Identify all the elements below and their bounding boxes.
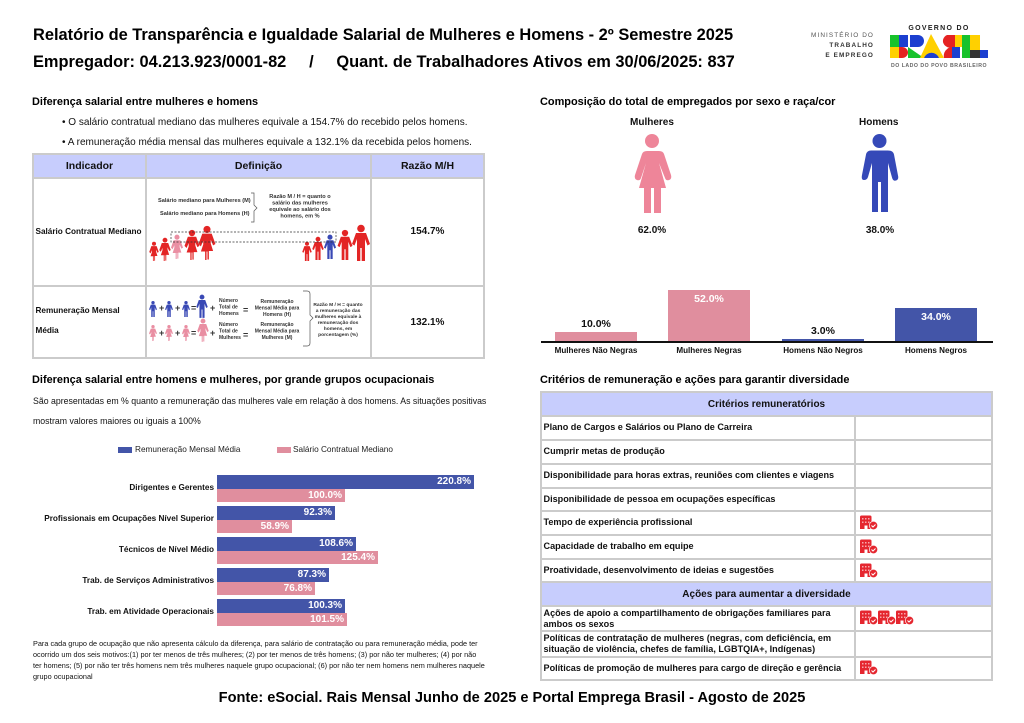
row: promoção: Políticas de promoção de mulheres para cargo de direção e gerência [544,663,841,673]
value: 101.5%: 101.5% [310,614,344,625]
value: 100.3%: 100.3% [308,600,342,611]
label: Homens Negros: Homens Negros [905,346,967,355]
header: indicator: Indicador [66,160,113,172]
diagram: average pay definition: Homens (H) [263,312,291,318]
diagram: median salary definition: Salário mediano para Homens (H) [160,211,250,217]
diagram: average pay definition: Total de [219,328,238,334]
diagram: average pay definition: Remuneração [260,299,294,305]
row: plano de cargos: Plano de Cargos e Salários ou Plano de Carreira [544,422,752,432]
bar: women non-black [555,332,637,342]
heading: occupational groups: Diferença salarial entre homens e mulheres, por grande grupos ocupacionais [32,374,434,386]
row: contratação: situação de violência, chefes de família, LGBTQIA+, Indígenas) [544,644,815,654]
bar: Operacionais median [217,613,347,626]
row: apoio: ambos os sexos [544,619,614,629]
header: definition: Definição [235,160,282,172]
diagram: average pay definition: = [243,305,248,315]
diagram: average pay definition: Mulheres [219,335,241,341]
value: 108.6%: 108.6% [319,538,353,549]
logo: ministry: E EMPREGO [825,52,874,59]
diagram: average pay definition: + [175,328,180,338]
legend: median salary [277,447,291,453]
text: footnote: ocorrido um dos seis motivos:(1) por ter menos de três mulheres; (2) por ter menos de três homens; (3) por não ter mulheres; (4) por não [33,650,476,659]
row: ocupações [540,487,857,512]
row: ocupações: Disponibilidade de pessoa em ocupações específicas [544,494,775,504]
cell: median salary label: Salário Contratual Mediano [36,227,142,236]
table: indicators [32,153,485,359]
text: explanation: São apresentadas em % quanto a remuneração das mulheres vale em relação à dos homens. As situações positivas [33,396,486,406]
row: promoção [540,656,857,681]
diagram: average pay definition: Mensal Média para [255,306,299,312]
bar: Profissionais median [217,520,292,533]
value: women share: 62.0% [638,225,666,236]
diagram: average pay definition: porcentagem (%) [318,332,358,338]
cell: average definition [145,285,372,359]
row: apoio: Ações de apoio a compartilhamento de obrigações familiares para [544,608,831,618]
icon: woman [634,134,672,213]
value: 3.0%: 3.0% [811,325,835,337]
row: horas extras: Disponibilidade para horas extras, reuniões com clientes e viagens [544,470,834,480]
diagram: average pay definition: a remuneração das [316,308,361,314]
bar: women black [668,290,750,342]
table: criteria [540,391,993,681]
cell: median value [370,177,485,287]
bar: Técnicos median [217,551,378,564]
bar: men black [895,308,977,342]
bar: Profissionais average [217,506,335,520]
diagram: average pay definition: = [191,303,196,313]
row: proatividade: Proatividade, desenvolvimento de ideias e sugestões [544,565,774,575]
text: footnote: grupo ocupacional [33,672,93,681]
bar: Serviços median [217,582,315,595]
text: footnote: ter homens; (5) por não ter três homens nem três mulheres naquele grupo ocupacional; (6) por não ter nem homens nem mulheres naquele [33,661,485,670]
cell: median value: 154.7% [411,226,444,237]
header: ratio [370,153,485,179]
value: 34.0%: 34.0% [921,311,951,323]
header: actions [540,581,993,607]
legend text: median salary: Salário Contratual Mediano [293,445,393,454]
header: ratio: Razão M/H [401,160,454,172]
cell: average value [370,285,485,359]
diagram: average pay definition: Total de [219,304,238,310]
bar chart: occupational groups [44,475,474,626]
value: men share: 38.0% [866,225,894,236]
bar: Serviços average [217,568,329,582]
label: Mulheres Negras: Mulheres Negras [676,346,742,355]
row: equipe [540,534,857,560]
value: 125.4%: 125.4% [341,552,375,563]
diagram: average pay definition: = [191,328,196,338]
label: Atividade Operacionais: Trab. em Atividade Operacionais [87,607,214,616]
text: footnote: Para cada grupo de ocupação que não apresenta cálculo da diferença, para salário de contratação ou para remuneração média, pode ter [33,639,478,648]
diagram: average pay definition: Mulheres (M) [262,335,293,341]
icon: man [862,134,898,212]
label: women: Mulheres [630,117,674,128]
logo: government of Brazil: GOVERNO DO [908,25,970,32]
heading: salary difference: Diferença salarial entre mulheres e homens [32,96,258,108]
value: 58.9%: 58.9% [261,521,289,532]
logo: ministry: MINISTÉRIO DO [811,32,874,39]
label: Dirigentes: Dirigentes e Gerentes [129,483,214,492]
heading: composition: Composição do total de empregados por sexo e raça/cor [540,96,835,108]
logo: government of Brazil [890,25,988,69]
value: 87.3%: 87.3% [298,569,326,580]
header: indicator [32,153,147,179]
value: 76.8%: 76.8% [284,583,312,594]
label: Técnicos: Técnicos de Nível Médio [119,545,214,554]
value: 52.0%: 52.0% [694,293,724,305]
title: Relatório de Transparência e Igualdade Salarial de Mulheres e Homens - 2º Semestre 2025 [33,26,733,44]
diagram: median salary definition: Razão M / H = quanto o [269,194,331,200]
diagram: average pay definition: = [243,330,248,340]
row: proatividade [540,558,857,583]
header: criteria [540,391,993,417]
label: men: Homens [859,117,898,128]
cell: average pay label: Média [36,326,59,335]
diagram: median salary definition: homens, em % [280,214,320,220]
row: contratação: Políticas de contratação de mulheres (negras, com deficiência, em [544,633,831,643]
header: criteria: Critérios remuneratórios [708,399,825,410]
diagram: average pay definition: Razão M / H = quanto [313,302,363,308]
cell: median definition [145,177,372,287]
diagram: median salary definition: equivale ao salário dos [269,207,331,213]
cell: average pay label [32,285,147,359]
bar: men non-black [782,339,864,342]
header: actions: Ações para aumentar a diversidade [682,588,851,600]
diagram: median salary definition: salário das mulheres [272,200,328,206]
diagram: average pay definition: Remuneração [260,322,294,328]
icons: company check marks [860,516,914,674]
text: footnote [33,639,485,681]
bar: Dirigentes median [217,489,345,502]
legend [118,445,393,454]
label: Profissionais: Profissionais em Ocupações Nível Superior [44,514,214,523]
cell: median salary label [32,177,147,287]
logo: ministry: TRABALHO [829,42,874,49]
diagram: average pay definition: + [210,303,215,313]
row: experiência: Tempo de experiência profissional [544,517,692,527]
row: contratação [540,630,857,658]
label: Serviços Administrativos: Trab. de Serviços Administrativos [82,576,214,585]
row: horas extras [540,463,857,489]
diagram: average pay definition: Número [219,298,238,304]
heading: criteria: Critérios de remuneração e ações para garantir diversidade [540,374,849,386]
row: metas: Cumprir metas de produção [544,446,665,456]
logo: ministry [811,31,874,59]
diagram: average pay definition: + [175,303,180,313]
row: experiência [540,510,857,536]
diagram: median salary definition: Salário mediano para Mulheres (M) [158,198,251,204]
label: Mulheres Não Negras: Mulheres Não Negras [555,346,637,355]
row: apoio [540,605,857,632]
text: median salary bullet: • O salário contratual mediano das mulheres equivale a 154.7% do recebido pelos homens. [62,117,468,128]
logo: government of Brazil: DO LADO DO POVO BRASILEIRO [891,63,987,69]
legend text: average pay: Remuneração Mensal Média [135,445,240,454]
cell: average value: 132.1% [411,317,444,328]
diagram: average pay definition: homens, em [324,326,353,332]
text: explanation [33,396,486,426]
legend: average pay [118,447,132,453]
text: explanation: mostram valores maiores ou iguais a 100% [33,416,201,426]
diagram: average pay definition: mulheres equivale à [315,314,362,320]
bar: Dirigentes average [217,475,474,489]
diagram: median salary definition [149,192,370,261]
value: 10.0%: 10.0% [581,318,611,330]
diagram: average pay definition: + [159,303,164,313]
bar chart: sex and race [541,290,993,355]
employer line: Empregador: 04.213.923/0001-82 / Quant. de Trabalhadores Ativos em 30/06/2025: 837 [33,53,735,71]
bar: Operacionais average [217,599,345,613]
label: Homens Não Negros: Homens Não Negros [783,346,863,355]
row: equipe: Capacidade de trabalho em equipe [544,541,694,551]
row: metas [540,439,857,465]
value: 100.0%: 100.0% [308,490,342,501]
value: 92.3%: 92.3% [304,507,332,518]
row: plano de cargos [540,415,857,441]
diagram: average pay definition: Mensal Média para [255,328,299,334]
header: definition [145,153,372,179]
text: average pay bullet: • A remuneração média mensal das mulheres equivale a 132.1% da recebida pelos homens. [62,137,472,148]
diagram: average pay definition: remuneração dos [318,320,359,326]
diagram: average pay definition: + [210,328,215,338]
diagram: average pay definition: Homens [219,311,239,317]
diagram: average pay definition: Número [219,322,238,328]
diagram: average pay definition [149,290,363,346]
value: 220.8%: 220.8% [437,476,471,487]
bar: Técnicos average [217,537,356,551]
diagram: average pay definition: + [159,328,164,338]
cell: average pay label: Remuneração Mensal [36,306,120,315]
source line: Fonte: eSocial. Rais Mensal Junho de 2025 e Portal Emprega Brasil - Agosto de 2025 [219,690,805,706]
